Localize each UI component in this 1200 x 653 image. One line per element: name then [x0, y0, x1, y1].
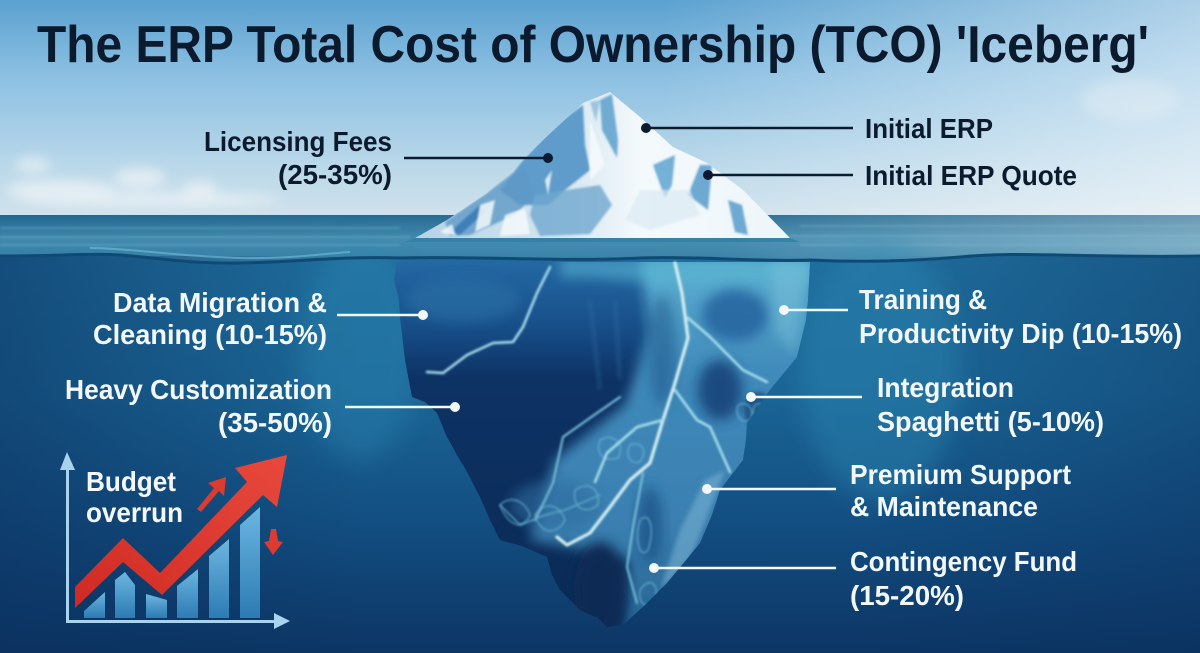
callout: Data Migration: Cleaning (10-15%)	[93, 319, 327, 350]
callout: Initial ERP	[641, 113, 993, 144]
callout: Data Migration: Data Migration &	[113, 287, 327, 318]
callout: Premium Support	[702, 459, 1071, 522]
chart bars	[84, 507, 260, 618]
background: sky	[0, 0, 1200, 216]
red trend arrow	[75, 455, 287, 608]
clouds	[5, 78, 1180, 207]
callout: Heavy Customization: (35-50%)	[218, 407, 332, 438]
callout: Training: Training &	[859, 284, 987, 315]
callout: Premium Support: & Maintenance	[850, 491, 1038, 522]
chart label: Budget	[86, 466, 176, 497]
callout: Integration Spaghetti: Integration	[877, 372, 1014, 403]
callout: Contingency Fund: Contingency Fund	[850, 546, 1077, 577]
chart label	[86, 466, 183, 528]
background: underwater	[0, 240, 1200, 653]
callout: Contingency Fund	[649, 546, 1077, 611]
callout: Integration Spaghetti: Spaghetti (5-10%)	[877, 406, 1104, 437]
callout: Heavy Customization: Heavy Customization	[65, 374, 332, 405]
callout: Initial ERP Quote	[703, 160, 1077, 191]
callout: Training	[779, 284, 1182, 349]
callout: Premium Support: Premium Support	[850, 459, 1071, 490]
iceberg cracks	[427, 263, 767, 603]
callout: Initial ERP: Initial ERP	[865, 113, 993, 144]
background: sea surface	[0, 215, 1200, 265]
callout: Licensing Fees: Licensing Fees	[204, 126, 392, 157]
chart label: overrun	[86, 497, 183, 528]
callout: Data Migration	[93, 287, 428, 350]
iceberg tip above water	[405, 92, 800, 242]
callout: Initial ERP Quote: Initial ERP Quote	[865, 160, 1077, 191]
callout: Licensing Fees	[204, 126, 553, 190]
callout: Training: Productivity Dip (10-15%)	[859, 318, 1182, 349]
iceberg body under water	[394, 258, 820, 640]
budget overrun chart	[60, 452, 290, 629]
callout: Heavy Customization	[65, 374, 460, 438]
small down arrow	[264, 529, 283, 555]
callout: Integration Spaghetti	[746, 372, 1104, 437]
small up arrow	[197, 477, 226, 512]
ice cell texture	[500, 404, 767, 605]
chart axes	[60, 452, 290, 629]
callout: Licensing Fees: (25-35%)	[278, 159, 392, 190]
callout: Contingency Fund: (15-20%)	[850, 580, 964, 611]
